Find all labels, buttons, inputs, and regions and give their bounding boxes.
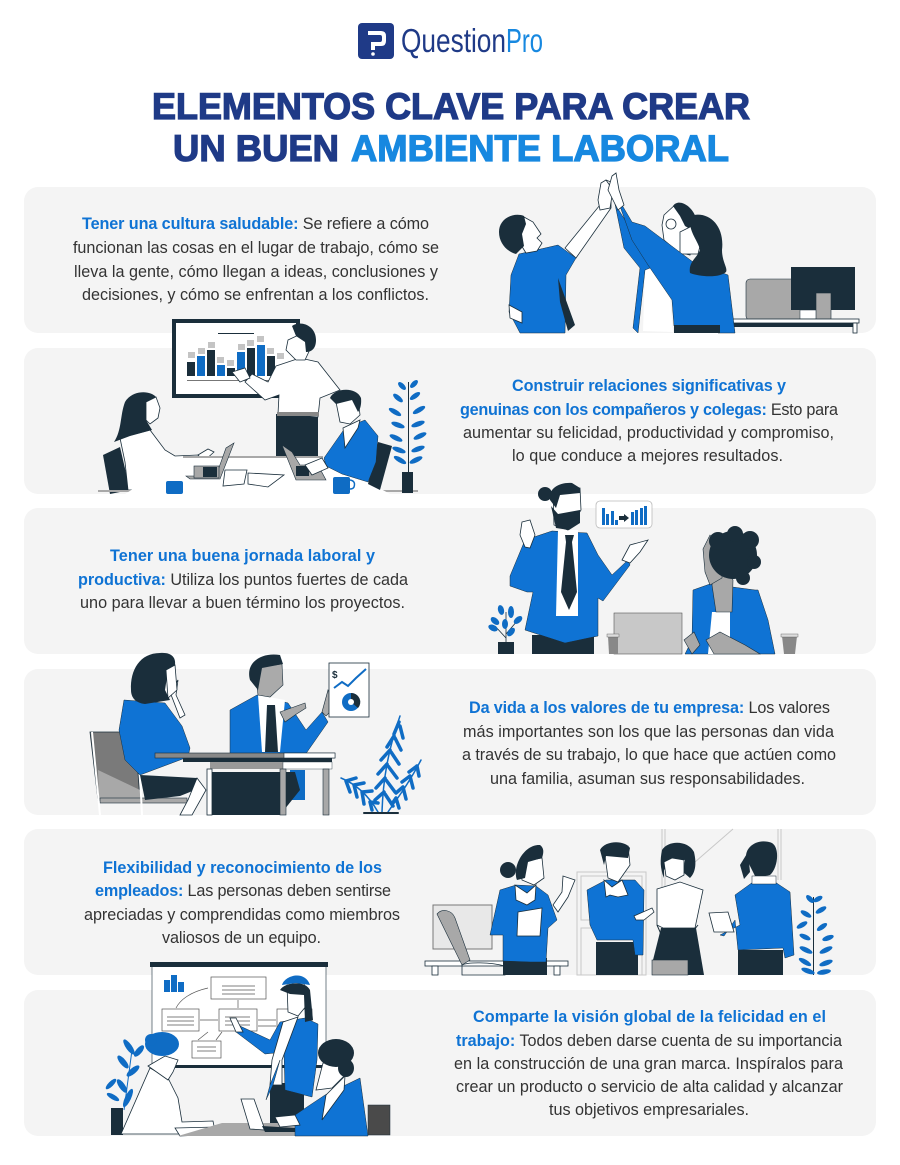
plant [388, 379, 427, 493]
man from behind [709, 841, 794, 975]
text block: flexibilidad y reconocimiento: apreciadas y comprendidas como miembros [84, 906, 400, 924]
text block: cultura saludable [73, 215, 439, 304]
text block: visión global: tus objetivos empresariales. [549, 1101, 749, 1119]
woman with paper [490, 845, 575, 975]
table and laptops [98, 443, 418, 494]
text block: flexibilidad y reconocimiento: valiosos de un equipo. [162, 929, 321, 947]
palm plant [341, 716, 421, 813]
plant [104, 1038, 146, 1135]
text block: cultura saludable: Tener una cultura saludable: Se refiere a cómo [82, 215, 429, 233]
report paper [329, 663, 369, 717]
table [155, 753, 335, 815]
text block: flexibilidad y reconocimiento [84, 859, 400, 947]
logo: QuestionPro: Question [401, 22, 506, 59]
panel: valores de la empresa [24, 669, 876, 815]
text block: valores de la empresa [462, 699, 836, 788]
laptop [241, 1099, 298, 1132]
seated man [305, 390, 392, 490]
chair [90, 732, 187, 815]
title: ELEMENTOS CLAVE PARA CREAR [152, 86, 750, 127]
whiteboard [150, 962, 328, 1068]
text block: flexibilidad y reconocimiento: Flexibilidad y reconocimiento de los [103, 859, 382, 877]
woman [119, 653, 206, 815]
plant [796, 894, 834, 976]
text block: valores de la empresa: Da vida a los valores de tu empresa: Los valores [469, 699, 830, 717]
illustration: flowchart whiteboard meeting [104, 962, 390, 1136]
text block: relaciones significativas: lo que conduce a mejores resultados. [512, 447, 783, 465]
text block: relaciones significativas: aumentar su felicidad, productividad y compromiso, [463, 424, 834, 442]
text block: jornada laboral [78, 547, 408, 612]
text block: relaciones significativas [460, 377, 838, 465]
text block: jornada laboral: uno para llevar a buen término los proyectos. [80, 594, 405, 612]
small plant [487, 604, 524, 654]
background office [425, 829, 781, 975]
logo: QuestionPro: Pro [506, 22, 543, 59]
panel: jornada laboral [24, 508, 876, 654]
text block: visión global: Comparte la visión global de la felicidad en el [473, 1008, 826, 1026]
title [152, 86, 750, 169]
seated man [275, 1039, 390, 1136]
text block: valores de la empresa: una familia, asuman sus responsabilidades. [490, 770, 805, 788]
text block: visión global [454, 1008, 844, 1119]
text block: valores de la empresa: a través de su trabajo, lo que hace que actúen como [462, 746, 836, 764]
panel: cultura saludable [24, 187, 876, 333]
title: UN BUEN [173, 128, 339, 169]
title: AMBIENTE LABORAL [351, 128, 729, 169]
panel: relaciones significativas [24, 348, 876, 494]
text block: relaciones significativas: Construir relaciones significativas y [512, 377, 786, 395]
chart board [172, 319, 300, 398]
text block: flexibilidad y reconocimiento: empleados: Las personas deben sentirse [95, 882, 391, 900]
text block: valores de la empresa: más importantes son los que las personas dan vida [463, 723, 834, 741]
presenter [232, 324, 340, 458]
seated woman from behind [121, 1032, 222, 1136]
illustration: bearded man and colleague [487, 483, 798, 654]
illustration: high five team [499, 173, 859, 333]
illustration: man explaining report [90, 653, 421, 815]
bearded man [510, 483, 648, 654]
text block: visión global: crear un producto o servicio de alta calidad y alcanzar [456, 1078, 844, 1096]
panel: visión global [24, 990, 876, 1136]
text block: cultura saludable: funcionan las cosas en el lugar de trabajo, cómo se [73, 239, 439, 257]
woman in white shirt [652, 843, 704, 975]
table [178, 1123, 318, 1136]
speech bubble chart [596, 501, 652, 528]
text block: cultura saludable: lleva la gente, cómo llegan a ideas, conclusiones y [74, 263, 439, 281]
text block: relaciones significativas: genuinas con los compañeros y colegas: Esto para [460, 401, 838, 419]
text block: visión global: en la construcción de una gran marca. Inspíralos para [454, 1055, 843, 1073]
text block: cultura saludable: decisiones, y cómo se enfrentan a los conflictos. [82, 286, 429, 304]
man with chart [212, 654, 332, 815]
man with sweater [587, 842, 654, 975]
standing presenter [230, 976, 318, 1128]
text block: jornada laboral: productiva: Utiliza los puntos fuertes de cada [78, 571, 408, 589]
text block: visión global: trabajo: Todos deben darse cuenta de su importancia [456, 1032, 842, 1050]
illustration: chart presentation meeting [98, 319, 427, 494]
woman at laptop [607, 526, 798, 654]
panel: flexibilidad y reconocimiento [24, 829, 876, 975]
text block: jornada laboral: Tener una buena jornada laboral y [110, 547, 375, 565]
report paper: $ [332, 670, 338, 681]
illustration: team talking in office [425, 829, 834, 976]
seated woman [103, 392, 214, 494]
